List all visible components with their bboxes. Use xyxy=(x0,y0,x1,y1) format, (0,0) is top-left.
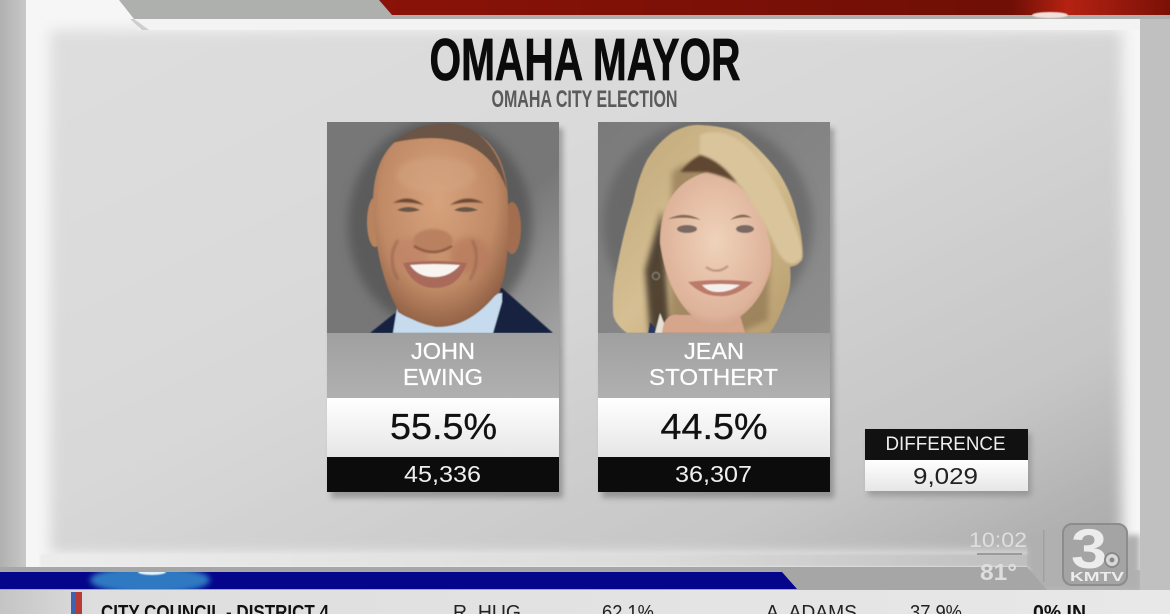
candidate card: Jean Stothert xyxy=(598,120,834,498)
clock and temperature: 10:02 xyxy=(969,529,1027,552)
clock and temperature: 81° xyxy=(980,559,1017,585)
vote share: John Ewing: 55.5% xyxy=(390,406,497,447)
name: John Ewing: JOHN xyxy=(411,338,475,364)
vote share: John Ewing xyxy=(327,398,559,457)
difference box: DIFFERENCE xyxy=(886,434,1006,455)
station logo: KMTV 3 xyxy=(1063,517,1127,585)
portrait: Jean Stothert xyxy=(598,120,830,333)
vote count: Jean Stothert xyxy=(598,457,830,492)
vote share: Jean Stothert xyxy=(598,398,830,457)
difference box: 9,029 xyxy=(913,463,978,489)
candidate card: John Ewing xyxy=(327,120,563,498)
red top banner xyxy=(379,0,1170,18)
clock and temperature xyxy=(969,529,1044,585)
vote count: John Ewing xyxy=(327,457,559,492)
station logo: KMTV 3: KMTV xyxy=(1070,569,1124,584)
name: John Ewing xyxy=(327,333,559,398)
difference box xyxy=(865,429,1031,496)
name: John Ewing: EWING xyxy=(403,364,483,390)
station logo: KMTV 3: 3 xyxy=(1071,517,1107,580)
election ticker xyxy=(0,590,1170,614)
name: Jean Stothert: JEAN xyxy=(684,338,744,364)
blue bar xyxy=(0,572,797,589)
vote count: John Ewing: 45,336 xyxy=(404,461,481,487)
lower band xyxy=(0,535,1140,590)
title: OMAHA MAYOR xyxy=(430,27,740,93)
subtitle: OMAHA CITY ELECTION xyxy=(492,86,678,113)
name: Jean Stothert xyxy=(598,333,830,398)
portrait: John Ewing xyxy=(327,120,559,333)
name: Jean Stothert: STOTHERT xyxy=(649,364,778,390)
vote share: Jean Stothert: 44.5% xyxy=(660,406,768,447)
vote count: Jean Stothert: 36,307 xyxy=(675,461,752,487)
